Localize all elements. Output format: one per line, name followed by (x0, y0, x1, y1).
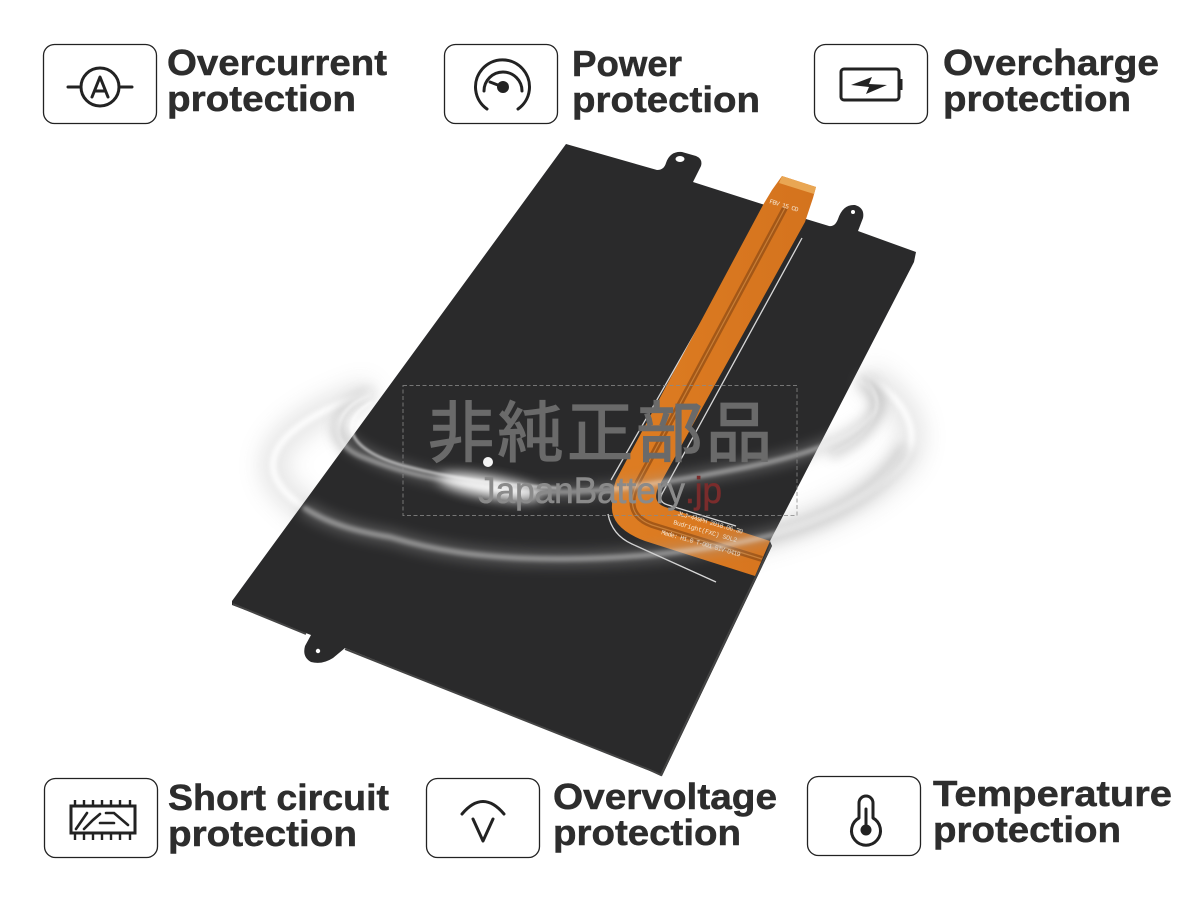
ribbon printed text: JLJ-449PH 2018.06.30 (676, 510, 744, 536)
label: overcharge: protection (943, 78, 1131, 119)
label: power: protection (572, 79, 760, 120)
label: overcurrent: protection (167, 78, 356, 119)
battery lighter edge (233, 545, 771, 775)
watermark dashed frame (403, 386, 797, 516)
watermark japanese text: 非純正部品 (428, 396, 772, 470)
icon box: circuit chip (44, 778, 158, 858)
watermark (403, 386, 797, 516)
feature: overcharge protection (814, 42, 1159, 124)
ribbon printed text: FBV 15 CD (768, 198, 799, 214)
feature: temperature protection (808, 773, 1172, 856)
swirl bright flare (437, 468, 543, 506)
flexible orange ribbon cable (612, 176, 816, 576)
feature: power protection (444, 43, 760, 124)
label: temperature: protection (933, 809, 1121, 850)
label: overvoltage (553, 776, 777, 853)
label: short circuit (168, 777, 389, 854)
label: short circuit: Short circuit (168, 777, 389, 818)
icon box: voltage (426, 778, 540, 858)
white dot (483, 457, 493, 467)
watermark site name: JapanBattery (478, 470, 685, 511)
energy swirl rings (303, 380, 906, 559)
ribbon printed text (660, 198, 799, 559)
battery casing with mounting tabs (232, 144, 916, 776)
icon box: gauge (444, 44, 558, 124)
icon box: battery (814, 44, 928, 124)
ribbon connector tip (779, 176, 816, 194)
label: overvoltage: Overvoltage (553, 776, 777, 817)
feature: overcurrent protection (44, 42, 387, 124)
label: overcurrent (167, 42, 387, 119)
label: power (572, 43, 760, 120)
energy swirl halo behind battery (273, 376, 911, 561)
label: temperature: Temperature (933, 773, 1172, 814)
feature: short circuit protection (44, 777, 389, 858)
ribbon centre traces (632, 208, 785, 559)
icon box: thermometer (808, 776, 920, 856)
label: short circuit: protection (168, 813, 357, 854)
label: overvoltage: protection (553, 812, 741, 853)
label: overcharge: Overcharge (943, 42, 1159, 83)
ribbon printed text: Budright(FXC) SOL2 (672, 519, 738, 544)
label: overcurrent: Overcurrent (167, 42, 387, 83)
mounting holes (316, 156, 855, 653)
feature: overvoltage protection (426, 776, 777, 858)
ribbon printed text: Made: H1.0 T-001 51V-0419 (660, 529, 741, 559)
white cutout lines (608, 225, 802, 582)
label: temperature (933, 773, 1172, 850)
icon box: ammeter (44, 44, 156, 124)
battery body (232, 144, 916, 776)
watermark domain suffix: .jp (685, 470, 722, 511)
label: power: Power (572, 43, 682, 84)
label: overcharge (943, 42, 1159, 119)
